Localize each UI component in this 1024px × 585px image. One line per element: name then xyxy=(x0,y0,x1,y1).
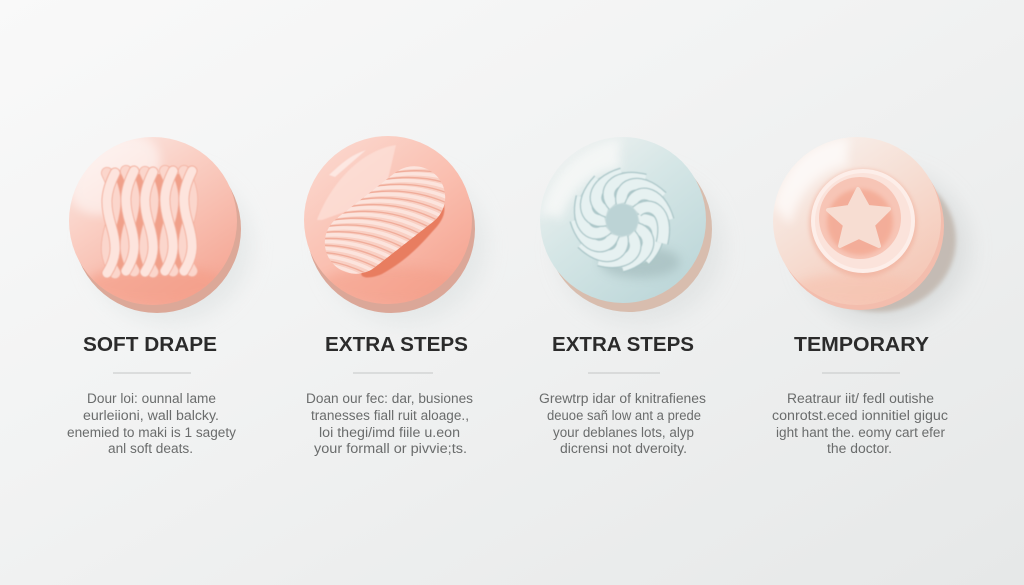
text block: extra steps two: your deblanes lots, alyp xyxy=(553,425,694,440)
text block: extra steps two: Grewtrp idar of knitrafienes xyxy=(539,391,706,406)
panel: soft drape xyxy=(68,137,248,453)
heading: extra steps one: EXTRA STEPS xyxy=(325,334,468,356)
icon: star xyxy=(828,189,889,246)
text block: soft drape: anl soft deats. xyxy=(108,441,193,456)
panel: temporary xyxy=(772,137,969,456)
icon: disc with braided yarn xyxy=(69,137,248,320)
text block: extra steps two: dicrensi not dveroity. xyxy=(560,441,687,456)
text block: temporary: the doctor. xyxy=(827,441,892,456)
heading: extra steps two: EXTRA STEPS xyxy=(552,334,694,356)
heading: temporary: TEMPORARY xyxy=(794,334,930,356)
text block: extra steps two xyxy=(539,391,706,456)
text block: soft drape: enemied to maki is 1 sagety xyxy=(67,425,236,440)
icon: disc with rope ring xyxy=(540,137,722,323)
text block: extra steps one: loi thegi/imd fiile u.eon xyxy=(319,425,460,440)
text block: extra steps one: your formall or pivvie;ts. xyxy=(314,441,467,456)
text block: soft drape xyxy=(67,391,236,456)
panel: extra steps two xyxy=(539,137,722,456)
icon: star button xyxy=(809,169,917,277)
icon: disc with star button xyxy=(773,137,969,326)
text block: temporary: ight hant the. eomy cart efer xyxy=(776,425,946,440)
text block: extra steps one: tranesses fiall ruit aloage., xyxy=(311,408,469,423)
text block: soft drape: eurleiioni, wall balcky. xyxy=(83,408,219,423)
heading: soft drape: SOFT DRAPE xyxy=(83,334,217,356)
text block: extra steps two: deuoe sañ low ant a prede xyxy=(547,408,701,423)
text block: temporary: conrotst.eced ionnitiel giguc xyxy=(772,408,948,423)
icon: twisted rope ring xyxy=(569,167,675,273)
icon: coiled yarn xyxy=(324,166,446,274)
text block: soft drape: Dour loi: ounnal lame xyxy=(87,391,216,406)
icon: disc with coiled yarn xyxy=(304,136,482,318)
text block: temporary: Reatraur iit/ fedl outishe xyxy=(787,391,934,406)
text block: temporary xyxy=(772,391,948,456)
icon: braided yarn bundle xyxy=(106,171,194,273)
text block: extra steps one: Doan our fec: dar, busiones xyxy=(306,391,473,406)
text block: extra steps one xyxy=(306,391,473,456)
panel: extra steps one xyxy=(304,136,482,456)
